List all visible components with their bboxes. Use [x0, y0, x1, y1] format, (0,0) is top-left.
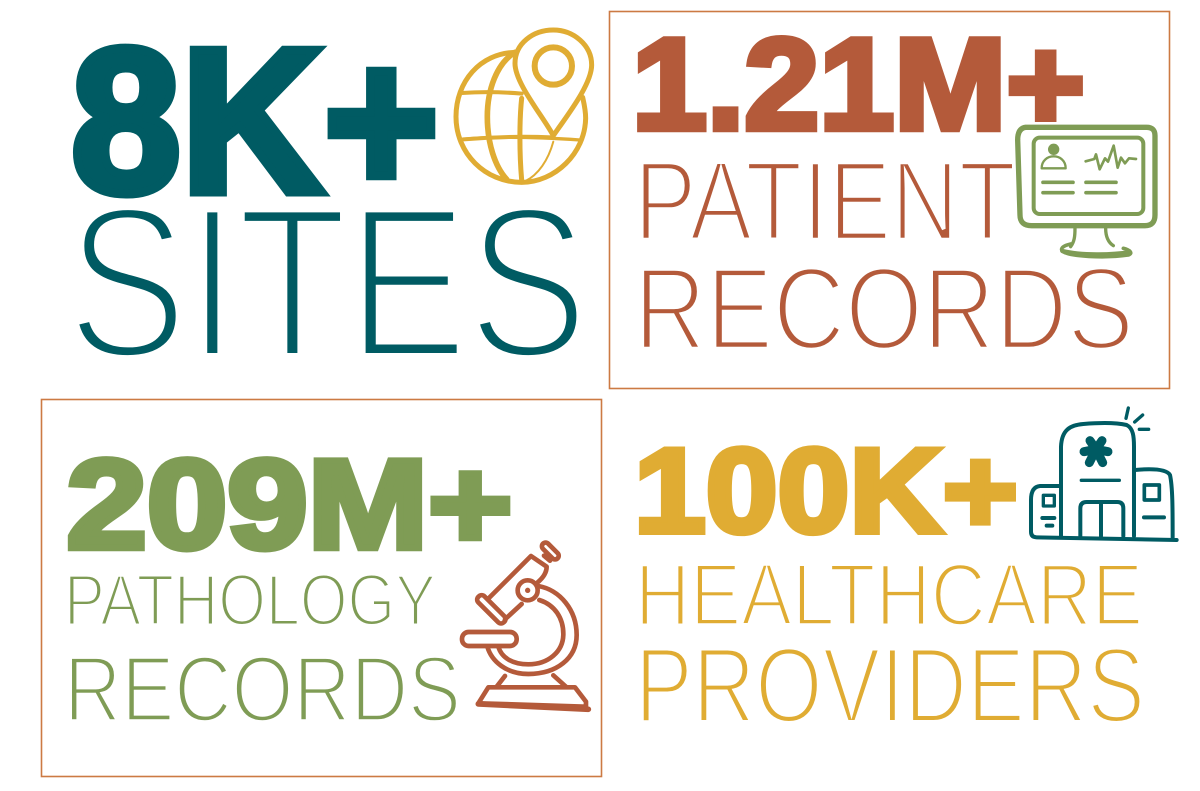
label: PATHOLOGY: PATHOLOGY	[64, 561, 436, 641]
icon: globe with location pin	[456, 30, 592, 182]
stat: 8K+: 8K+	[71, 6, 439, 236]
panel: patient records	[610, 11, 1170, 388]
icon: hospital building	[1031, 408, 1177, 540]
panel: sites	[67, 6, 592, 403]
panel border	[42, 400, 602, 776]
panel: pathology records	[42, 400, 602, 776]
icon: microscope	[462, 541, 588, 709]
hospital cross emblem	[1084, 441, 1108, 463]
stat: 1.21M+: 1.21M+	[632, 11, 1085, 157]
panel: healthcare providers	[634, 408, 1177, 745]
panel border	[610, 12, 1170, 388]
icon: monitor with patient chart	[1018, 127, 1155, 257]
label: SITES: SITES	[67, 161, 588, 403]
label: PATIENT: PATIENT	[634, 138, 1016, 264]
label: RECORDS: RECORDS	[64, 637, 461, 741]
stat: 100K+: 100K+	[634, 424, 1018, 558]
stat: 209M+: 209M+	[66, 433, 512, 575]
